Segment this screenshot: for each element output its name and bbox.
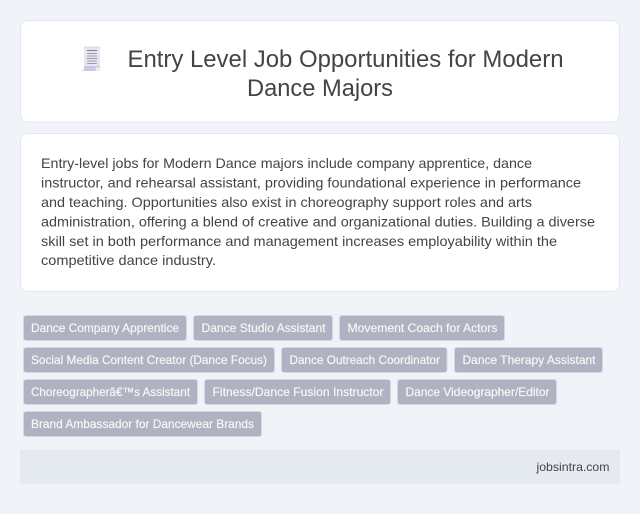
text block: description [41, 155, 595, 268]
tag [398, 380, 556, 404]
tag [340, 316, 504, 340]
tag: Dance Studio Assistant [202, 321, 326, 335]
tag: Fitness/Dance Fusion Instructor [212, 385, 384, 399]
footer: jobsintra.com [535, 460, 610, 474]
tag [24, 316, 186, 340]
text block: description: skill set in both performance and management increases employability within the [41, 233, 557, 249]
panel: header [20, 20, 620, 122]
panel: job tags [24, 316, 602, 436]
tag: Choreographerâ€™s Assistant [31, 385, 191, 399]
tag: Dance Outreach Coordinator [290, 353, 440, 367]
tag: Dance Therapy Assistant [462, 353, 596, 367]
text block: description: and teaching. Opportunities also exist in choreography support roles and arts [41, 194, 532, 210]
text block: description: Entry-level jobs for Modern Dance majors include company apprentice, dance [41, 155, 532, 171]
tag [204, 380, 390, 404]
text block: description: competitive dance industry. [41, 252, 216, 268]
tag: Social Media Content Creator (Dance Focus) [31, 353, 267, 367]
tag: Dance Company Apprentice [31, 321, 179, 335]
tag [24, 348, 274, 372]
tag: Movement Coach for Actors [348, 321, 498, 335]
text block: description: administration, offering a blend of creative and organizational duties. Building a diverse [41, 214, 595, 230]
tag [454, 348, 602, 372]
text block: description: instructor, and rehearsal assistant, providing foundational experience in performance [41, 174, 581, 190]
title [128, 46, 564, 102]
tag [194, 316, 332, 340]
title: Entry Level Job Opportunities for Modern [128, 46, 564, 73]
title: Dance Majors [247, 75, 393, 102]
tag [24, 412, 262, 436]
tag [282, 348, 447, 372]
footer [20, 450, 620, 484]
panel: description [20, 134, 620, 292]
tag [24, 380, 198, 404]
icon: document scroll [82, 47, 100, 71]
tag: Brand Ambassador for Dancewear Brands [31, 417, 254, 431]
tag: Dance Videographer/Editor [406, 385, 550, 399]
